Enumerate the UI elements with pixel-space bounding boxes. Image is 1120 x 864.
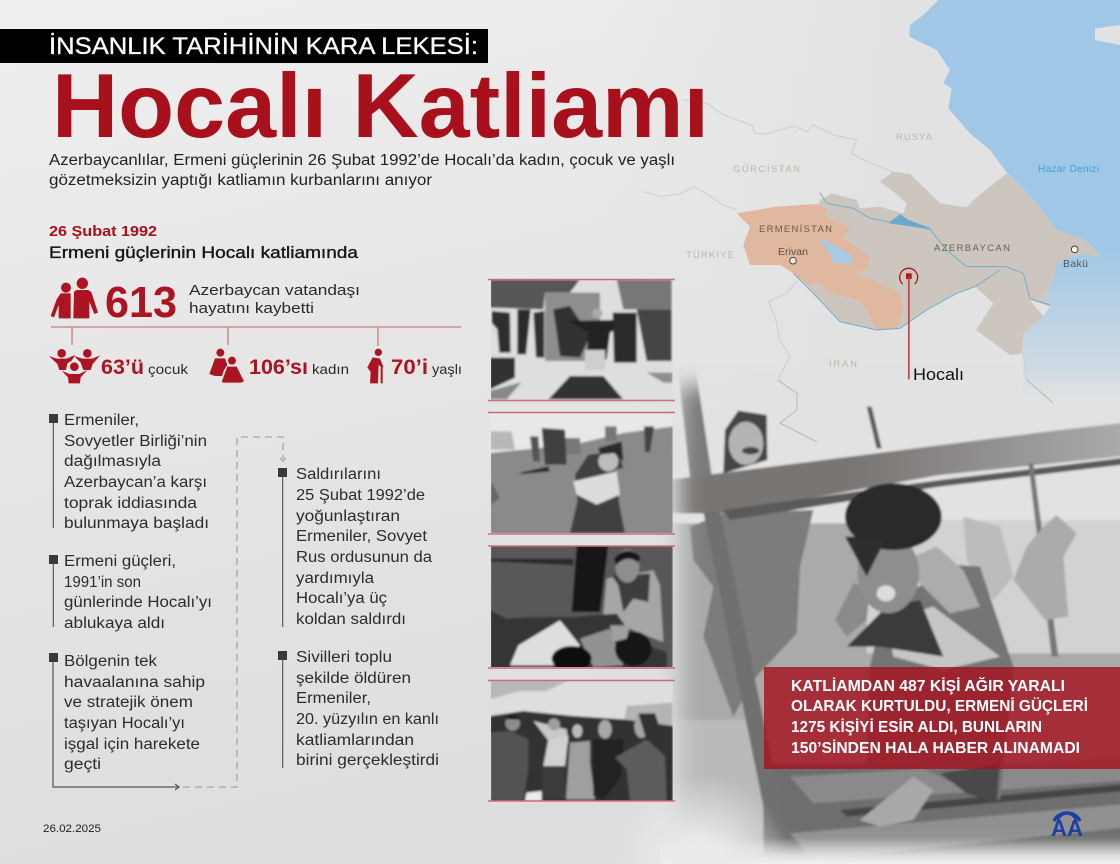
text block: step 5: Sivilleri toplu bbox=[296, 649, 392, 666]
icon: children bbox=[49, 349, 100, 383]
logo: AA: AA bbox=[1051, 815, 1083, 841]
text block: step 2 bbox=[49, 553, 212, 632]
stat: elderly bbox=[391, 356, 462, 379]
background figure bbox=[1013, 515, 1077, 620]
title: Hocalı Katliamı bbox=[52, 56, 709, 157]
marker: Bakü bbox=[1071, 246, 1078, 253]
text block: step 1: dağılmasıyla bbox=[64, 453, 161, 470]
stat: women: 106’sı bbox=[249, 356, 308, 379]
map labels: GÜRCİSTAN bbox=[733, 164, 800, 175]
country: Armenia bbox=[737, 204, 903, 330]
stat: women: kadın bbox=[312, 361, 349, 377]
country: Azerbaijan bbox=[793, 172, 1102, 355]
stat: children: 63’ü bbox=[101, 356, 144, 379]
main photo: crying child behind rebar bbox=[669, 372, 1120, 858]
text block: step 4: Rus ordusunun da bbox=[296, 549, 432, 566]
intro text: Azerbaycanlılar, Ermeni güçlerinin 26 Şubat 1992’de Hocalı’da kadın, çocuk ve yaşlı bbox=[49, 152, 675, 169]
text block: step 4: yardımıyla bbox=[296, 570, 374, 587]
intro text bbox=[49, 152, 675, 189]
text block: step 4: Saldırılarını bbox=[296, 466, 381, 483]
intro text: gözetmeksizin yaptığı katliamın kurbanlarını anıyor bbox=[49, 172, 432, 189]
map labels: Hazar Denizi bbox=[1038, 164, 1099, 175]
icon: Hocalı marker and label bbox=[900, 268, 964, 384]
photo 2: woman with child bbox=[491, 425, 673, 533]
map borders over photo bbox=[777, 380, 1053, 442]
total label: Azerbaycan vatandaşı bbox=[189, 282, 360, 299]
text block: step 5: katliamlarından bbox=[296, 732, 414, 749]
text block: step 1: Sovyetler Birliği’nin bbox=[64, 433, 207, 450]
text block: step 1: Azerbaycan’a karşı bbox=[64, 474, 207, 491]
text block: step 5: birini gerçekleştirdi bbox=[296, 752, 439, 769]
title bar: İNSANLIK TARİHİNİN KARA LEKESİ: bbox=[49, 33, 478, 60]
text block: step 5 bbox=[278, 649, 439, 769]
photo fade: bottom edge bbox=[610, 774, 1120, 864]
text block: step 3: taşıyan Hocalı’yı bbox=[64, 715, 185, 732]
stat: children bbox=[101, 356, 189, 379]
text block: step 2: 1991’in son bbox=[64, 574, 141, 591]
icon: Hocalı marker and label: Hocalı bbox=[913, 365, 964, 384]
total label: hayatını kaybetti bbox=[189, 300, 314, 317]
photo 3: man over wounded bbox=[490, 542, 673, 671]
callout: casualties: KATLİAMDAN 487 KİŞİ AĞIR YARALI bbox=[791, 677, 1065, 695]
map labels: Bakü bbox=[1063, 258, 1088, 270]
icon: adults bbox=[51, 278, 98, 318]
stat: women bbox=[249, 356, 349, 379]
date stamp: 26.02.2025 bbox=[43, 823, 101, 835]
text block: step 3: işgal için harekete bbox=[64, 736, 200, 753]
text block: step 3: Bölgenin tek bbox=[64, 653, 157, 670]
photo frame rules bbox=[488, 280, 675, 801]
total label bbox=[189, 282, 360, 317]
title bar bbox=[0, 29, 488, 63]
child bbox=[867, 565, 1013, 800]
map labels: TÜRKİYE bbox=[686, 250, 734, 261]
stats panel bbox=[49, 278, 462, 383]
map labels: ERMENİSTAN bbox=[759, 224, 832, 235]
reservoir bbox=[888, 214, 932, 228]
text block: step 4 bbox=[278, 466, 432, 628]
beam bbox=[647, 422, 1120, 513]
sub heading: Ermeni güçlerinin Hocalı katliamında bbox=[49, 244, 359, 262]
borders bbox=[643, 100, 1050, 398]
lake Sevan bbox=[817, 238, 853, 263]
text block: step 2: ablukaya aldı bbox=[64, 615, 165, 632]
map bbox=[600, 0, 1120, 420]
marker: Erivan bbox=[790, 257, 796, 264]
text block: step 4: 25 Şubat 1992’de bbox=[296, 487, 425, 504]
callout: casualties bbox=[764, 667, 1120, 769]
text block: step 3: havaalanına sahip bbox=[64, 674, 205, 691]
text block: step 4: koldan saldırdı bbox=[296, 611, 406, 628]
text block: step 1: bulunmaya başladı bbox=[64, 515, 209, 532]
stat: elderly: 70’i bbox=[391, 356, 428, 379]
text block: step 3: ve stratejik önem bbox=[64, 694, 193, 711]
stat: elderly: yaşlı bbox=[432, 361, 462, 377]
text block: step 2: günlerinde Hocalı’yı bbox=[64, 594, 212, 611]
map labels bbox=[686, 132, 1099, 370]
text block: step 3 bbox=[49, 653, 205, 773]
map labels: Erivan bbox=[778, 246, 808, 258]
text block: step 1: Ermeniler, bbox=[64, 412, 139, 429]
date heading: 26 Şubat 1992 bbox=[49, 223, 157, 240]
woman bbox=[690, 510, 813, 717]
rivers bbox=[793, 193, 1050, 330]
text block: step 5: 20. yüzyılın en kanlı bbox=[296, 711, 439, 728]
photo 1: memorial bbox=[490, 276, 673, 403]
map labels: İRAN bbox=[829, 359, 857, 370]
text block: step 3: geçti bbox=[64, 756, 101, 773]
text block: step 1: toprak iddiasında bbox=[64, 495, 197, 512]
total number: 613 bbox=[105, 278, 177, 327]
text block: step 4: yoğunlaştıran bbox=[296, 508, 400, 525]
map labels: AZERBAYCAN bbox=[934, 243, 1010, 254]
callout: casualties: OLARAK KURTULDU, ERMENİ GÜÇLERİ bbox=[791, 698, 1088, 715]
text block: step 5: Ermeniler, bbox=[296, 690, 371, 707]
text block: step 2: Ermeni güçleri, bbox=[64, 553, 176, 570]
text block: step 5: şekilde öldüren bbox=[296, 670, 411, 687]
icon: women bbox=[209, 349, 244, 383]
photo 4: mourners bbox=[490, 676, 673, 803]
text block: step 4: Hocalı’ya üç bbox=[296, 590, 387, 607]
text block: step 1 bbox=[49, 412, 209, 532]
text block: step 4: Ermeniler, Sovyet bbox=[296, 528, 428, 545]
icon: elderly bbox=[367, 349, 383, 383]
sea: Caspian bbox=[909, 0, 1120, 417]
map labels: RUSYA bbox=[896, 132, 933, 143]
timeline connector arrows bbox=[53, 437, 286, 790]
rebar verticals bbox=[680, 372, 712, 478]
callout: casualties: 1275 KİŞİYİ ESİR ALDI, BUNLARIN bbox=[791, 719, 1042, 736]
callout: casualties: 150’SİNDEN HALA HABER ALINAMADI bbox=[791, 740, 1080, 757]
stat: children: çocuk bbox=[148, 361, 189, 377]
